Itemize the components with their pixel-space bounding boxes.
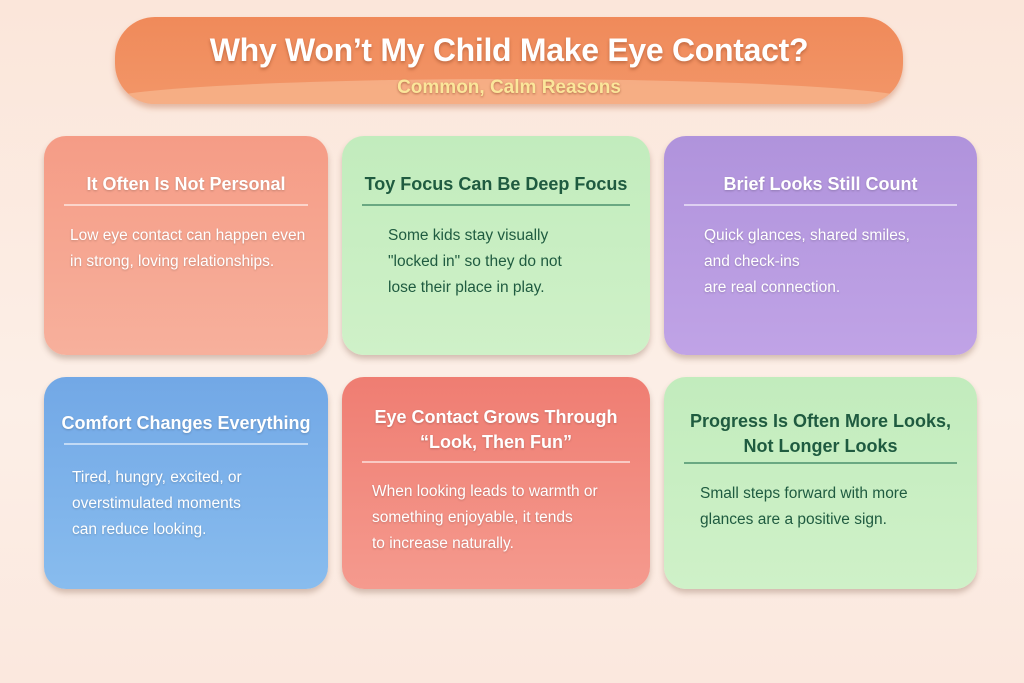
- panel: brief looks: are real connection.: [704, 279, 840, 296]
- panel: brief looks: Quick glances, shared smiles,: [704, 227, 910, 244]
- panel: not personal: in strong, loving relationships.: [70, 253, 274, 270]
- panel: progress: glances are a positive sign.: [700, 511, 887, 528]
- panel: progress: Not Longer Looks: [744, 436, 898, 456]
- panel: progress: Progress Is Often More Looks,: [690, 411, 951, 431]
- panel: look then fun: something enjoyable, it tends: [372, 509, 573, 526]
- panel: toy focus: Some kids stay visually: [388, 227, 548, 244]
- panel: brief looks: Brief Looks Still Count: [723, 174, 918, 194]
- panel: progress: Small steps forward with more: [700, 485, 908, 502]
- panel: not personal: [44, 136, 328, 355]
- panel: look then fun: to increase naturally.: [372, 535, 514, 552]
- panel: comfort: overstimulated moments: [72, 495, 241, 512]
- subtitle: Common, Calm Reasons: [397, 77, 621, 98]
- panel: comfort: [44, 377, 328, 589]
- panel: comfort: Comfort Changes Everything: [61, 413, 311, 433]
- panel: toy focus: Toy Focus Can Be Deep Focus: [365, 174, 627, 194]
- panel: progress: [664, 377, 977, 589]
- panel: brief looks: [664, 136, 977, 355]
- panel: look then fun: [342, 377, 650, 589]
- title banner: [115, 17, 903, 104]
- panel: look then fun: “Look, Then Fun”: [420, 432, 572, 452]
- panel: comfort: can reduce looking.: [72, 521, 206, 538]
- panel: toy focus: lose their place in play.: [388, 279, 545, 296]
- panel: not personal: Low eye contact can happen even: [70, 227, 305, 244]
- panel: look then fun: Eye Contact Grows Through: [374, 407, 618, 427]
- panel: not personal: It Often Is Not Personal: [86, 174, 286, 194]
- panel: brief looks: and check-ins: [704, 253, 800, 270]
- panel: look then fun: When looking leads to warmth or: [372, 483, 598, 500]
- panel: comfort: Tired, hungry, excited, or: [72, 469, 242, 486]
- panel: toy focus: [342, 136, 650, 355]
- title: Why Won’t My Child Make Eye Contact?: [210, 32, 808, 68]
- panel: toy focus: "locked in" so they do not: [388, 253, 562, 270]
